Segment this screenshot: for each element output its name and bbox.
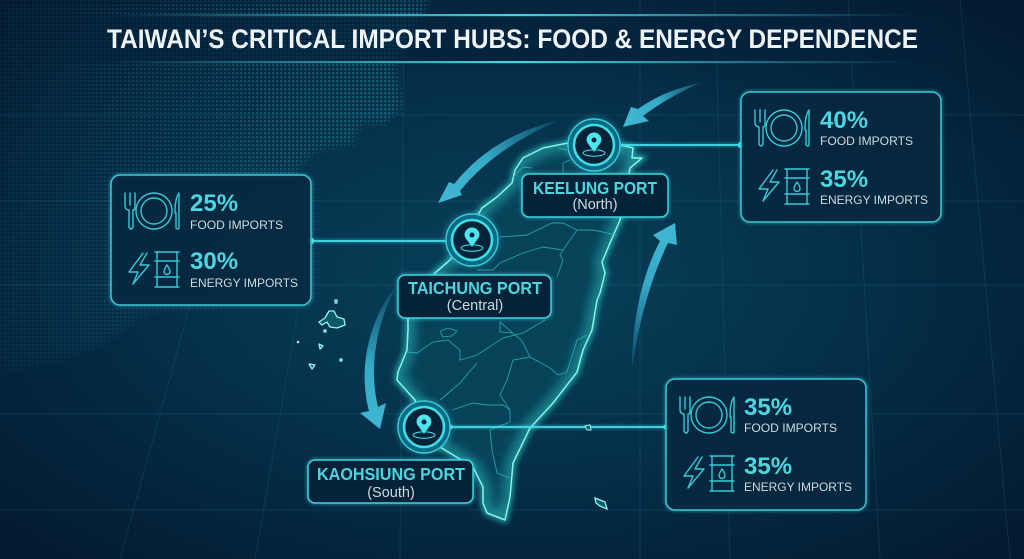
connector: Keelung: [618, 142, 744, 148]
pin: Kaohsiung: [396, 399, 452, 455]
icon: lightning bolt and oil barrel: [684, 456, 734, 491]
county borders: [407, 148, 617, 478]
label: Kaohsiung Port: KAOHSIUNG PORT: [317, 464, 465, 484]
panel: Kaohsiung stats: 35%: [744, 453, 792, 480]
arrow: into Keelung: [623, 83, 700, 127]
panel: Taichung stats: 30%: [190, 248, 238, 275]
label: Taichung Port: TAICHUNG PORT: [408, 278, 542, 298]
icon: lightning bolt and oil barrel: [129, 252, 179, 287]
icon: fork, plate and knife: [680, 397, 734, 433]
pin: Keelung: [566, 117, 622, 173]
dotted map of mainland Asia: [4, 0, 430, 366]
panel: Keelung stats: 35%: [820, 166, 868, 193]
panel: Kaohsiung stats: [666, 379, 866, 510]
arrow: Keelung to Taichung: [438, 120, 560, 203]
icon: lightning bolt and oil barrel: [759, 169, 809, 204]
panel: Kaohsiung stats: 35%: [744, 394, 792, 421]
panel: Keelung stats: FOOD IMPORTS: [820, 134, 913, 148]
panel: Kaohsiung stats: ENERGY IMPORTS: [744, 480, 852, 494]
connector: Kaohsiung: [447, 424, 669, 430]
panel: Taichung stats: ENERGY IMPORTS: [190, 276, 298, 290]
label: Kaohsiung Port: (South): [367, 485, 415, 501]
panel: Kaohsiung stats: FOOD IMPORTS: [744, 421, 837, 435]
label: Kaohsiung Port: [308, 460, 473, 503]
islands: Penghu: [297, 300, 345, 369]
panel: Taichung stats: FOOD IMPORTS: [190, 218, 283, 232]
panel: Keelung stats: ENERGY IMPORTS: [820, 193, 928, 207]
arrow: Taichung to Kaohsiung: [360, 285, 397, 429]
pin: Taichung: [444, 212, 500, 268]
title band: [40, 14, 984, 63]
panel: Taichung stats: 25%: [190, 190, 238, 217]
label: Keelung Port: (North): [572, 197, 618, 213]
panel: Keelung stats: 40%: [820, 107, 868, 134]
arrow: Kaohsiung to Keelung: [632, 223, 677, 370]
islands: Orchid: [595, 498, 607, 509]
label: Taichung Port: (Central): [447, 298, 503, 314]
label: Taichung Port: [398, 275, 551, 318]
icon: fork, plate and knife: [125, 193, 179, 229]
panel: Keelung stats: [741, 92, 941, 222]
icon: fork, plate and knife: [755, 110, 809, 146]
title: TAIWAN’S CRITICAL IMPORT HUBS: FOOD & ENERGY DEPENDENCE: [107, 24, 918, 54]
label: Keelung Port: [522, 174, 668, 217]
panel: Taichung stats: [111, 175, 311, 305]
map: Taiwan island: [397, 140, 642, 520]
label: Keelung Port: KEELUNG PORT: [533, 178, 657, 198]
connector: Taichung: [308, 238, 446, 244]
